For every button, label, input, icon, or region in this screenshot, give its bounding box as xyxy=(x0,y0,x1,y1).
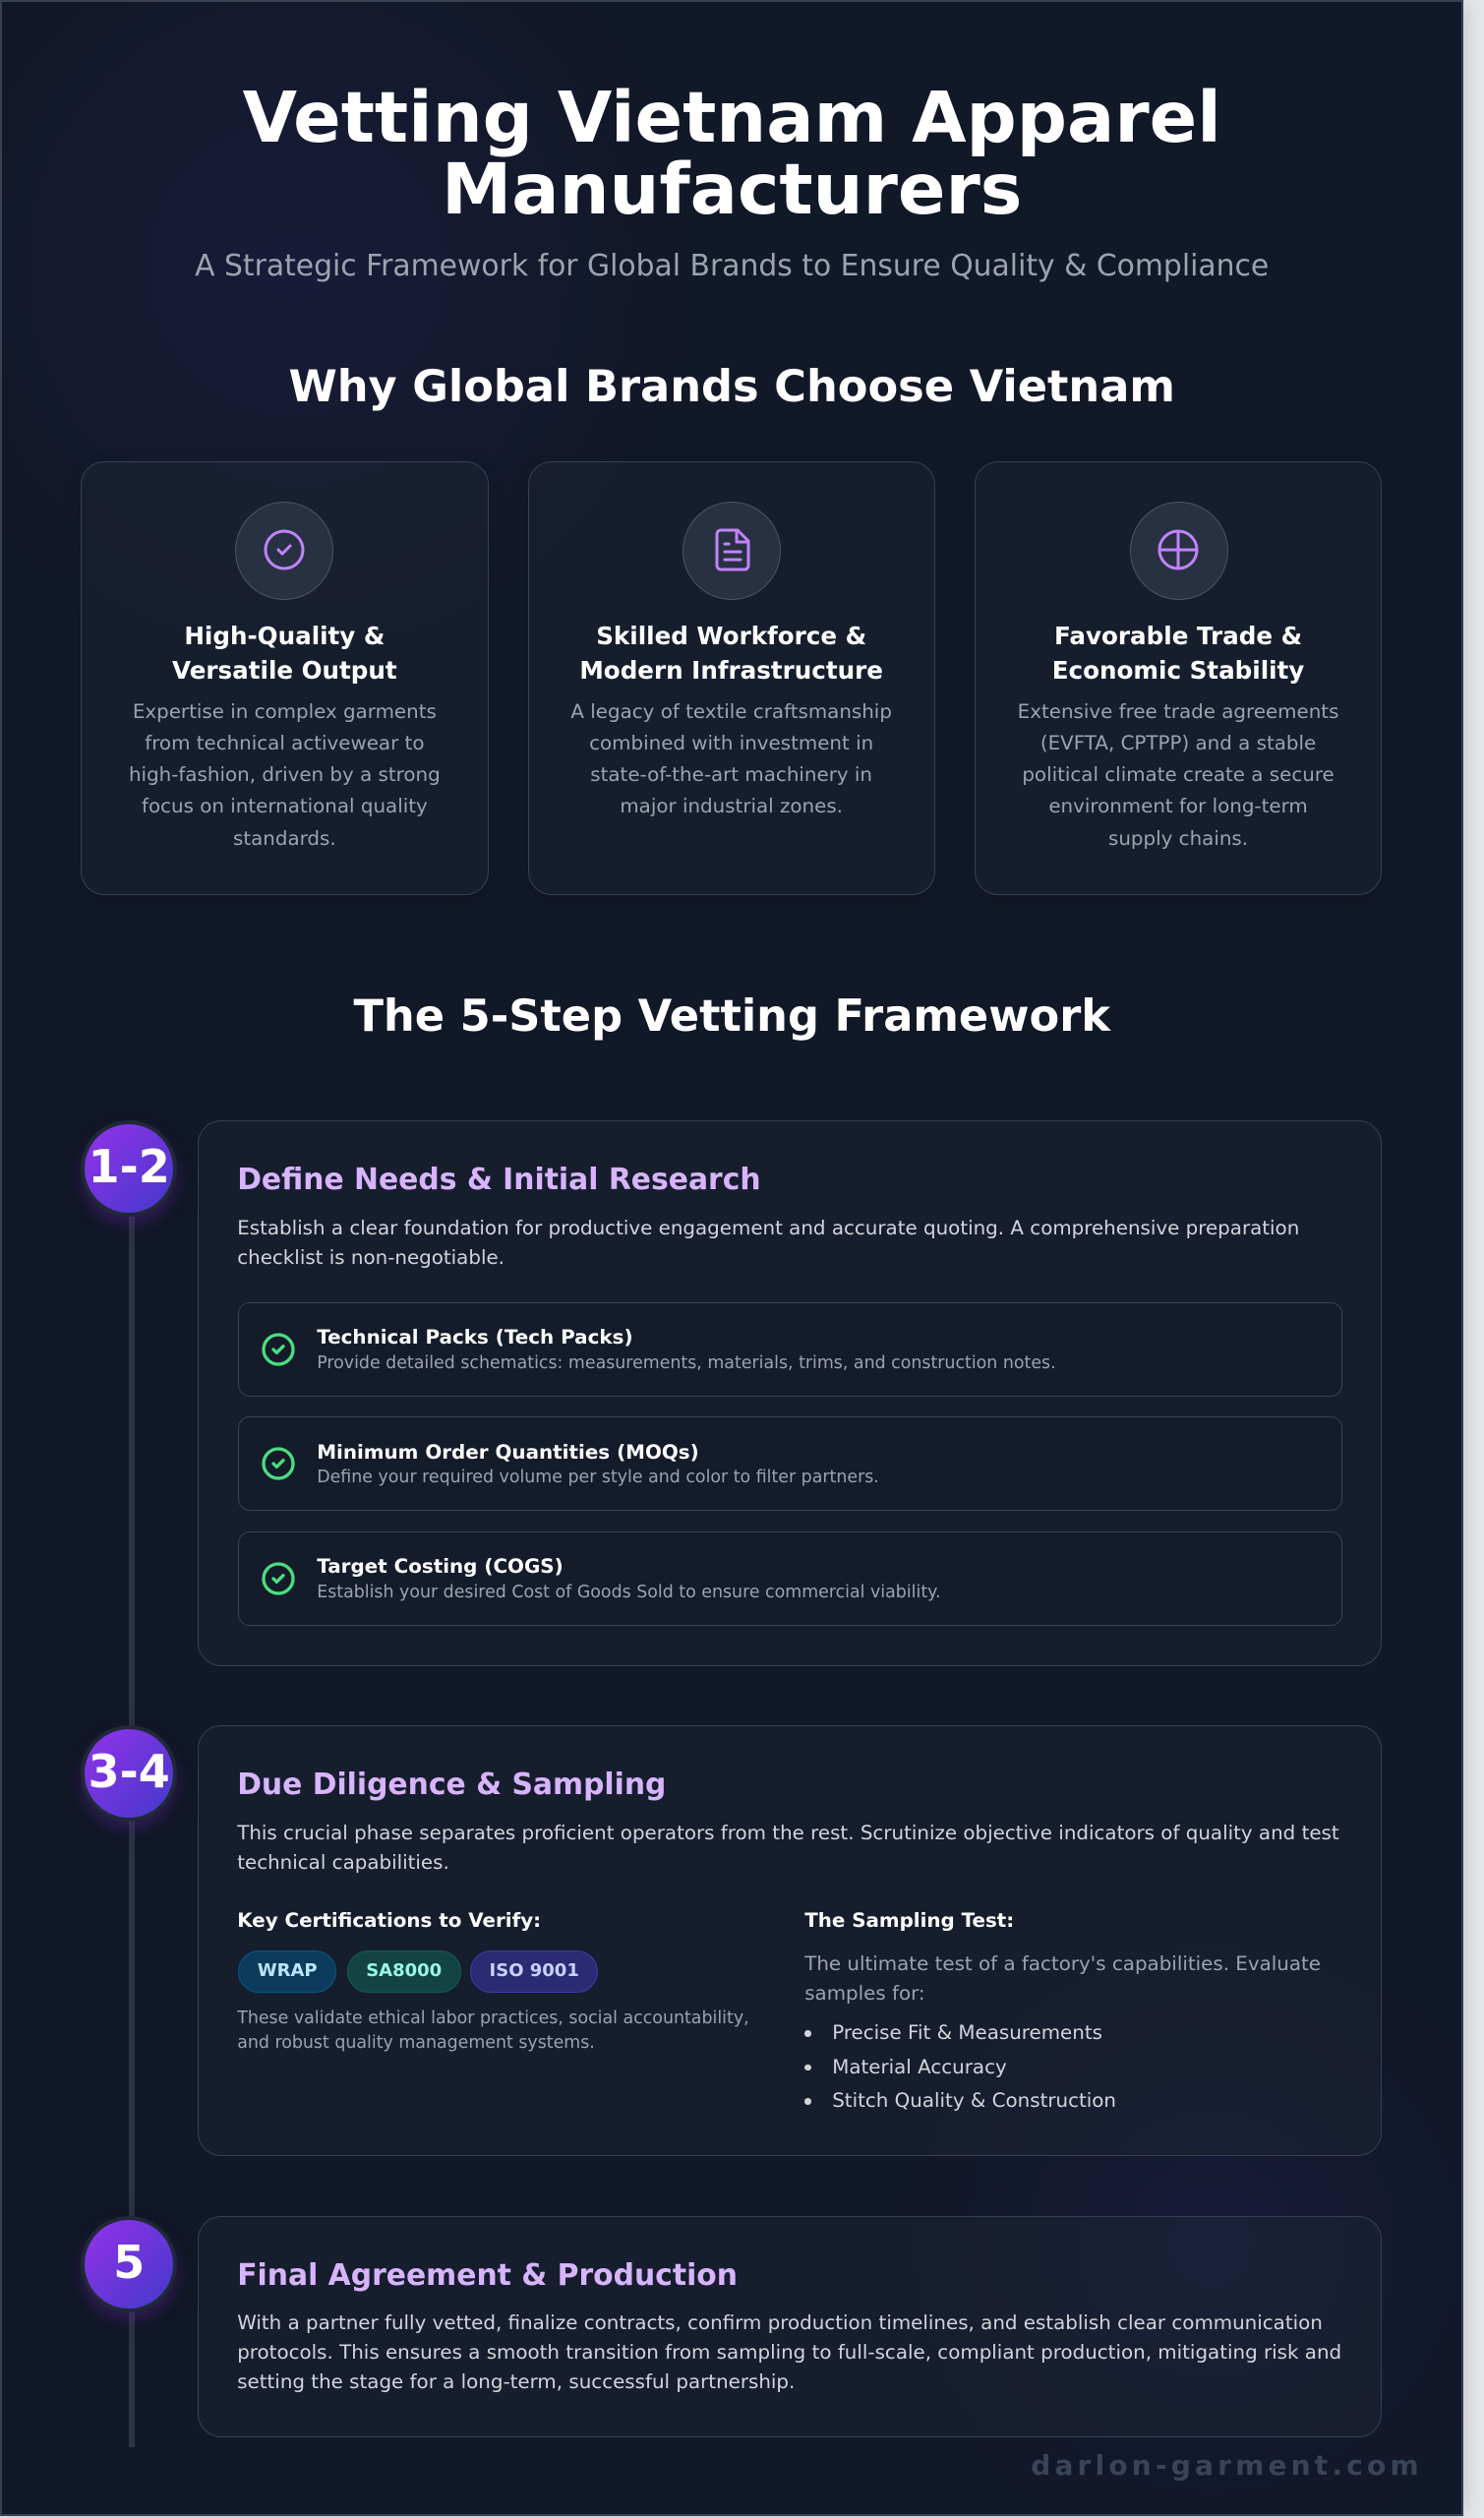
icon: check circle xyxy=(235,502,333,600)
card heading: favorable trade xyxy=(1052,622,1304,685)
checklist title: MOQs: Minimum Order Quantities (MOQs) xyxy=(317,1440,699,1464)
tag: WRAP: WRAP xyxy=(258,1959,318,1981)
tag: ISO 9001: ISO 9001 xyxy=(490,1959,579,1981)
subheading: key certifications: Key Certifications to Verify: xyxy=(237,1908,541,1932)
step text: final agreement: setting the stage for a long-term, successful partnership. xyxy=(237,2370,795,2392)
card text: skilled workforce: state-of-the-art machinery in xyxy=(590,763,872,786)
card text: favorable trade: environment for long-term xyxy=(1048,795,1308,817)
card heading: high-quality: Versatile Output xyxy=(172,655,397,685)
icon: globe xyxy=(1130,502,1228,600)
step badge 3-4: 3-4 xyxy=(89,1745,170,1798)
card text: favorable trade: supply chains. xyxy=(1108,827,1248,850)
card text: high-quality: Expertise in complex garments xyxy=(133,700,437,722)
sampling text: samples for: xyxy=(804,1981,925,2005)
card text: favorable trade: Extensive free trade agreements xyxy=(1018,700,1338,722)
watermark: darlon-garment.com xyxy=(1031,2449,1423,2481)
step text: final agreement xyxy=(237,2311,1341,2392)
checklist title: COGS: Target Costing (COGS) xyxy=(317,1554,564,1578)
title xyxy=(243,77,1221,230)
checklist: COGS xyxy=(238,1530,1342,1625)
sampling list: Stitch Quality & Construction xyxy=(832,2089,1116,2112)
card text: high-quality: focus on international quality xyxy=(142,795,428,817)
card heading: high-quality: High-Quality & xyxy=(184,622,385,649)
card text: favorable trade: political climate create a secure xyxy=(1022,763,1335,786)
card heading: skilled workforce xyxy=(579,622,883,685)
timeline line xyxy=(129,1180,135,2447)
title: Manufacturers xyxy=(442,148,1022,230)
step text: final agreement: protocols. This ensures a smooth transition from sampling to full-scale, compliant production, mitigating risk and xyxy=(237,2341,1341,2363)
step heading: define needs: Define Needs & Initial Research xyxy=(237,1163,761,1196)
card text: favorable trade: (EVFTA, CPTPP) and a stable xyxy=(1040,732,1316,754)
step badge 5: 5 xyxy=(113,2235,145,2288)
certifications note: These validate ethical labor practices, social accountability, xyxy=(237,2008,749,2028)
panel: step 3-4 xyxy=(198,1725,1382,2156)
step text: final agreement: With a partner fully vetted, finalize contracts, confirm production timelines, and establish clear communication xyxy=(237,2311,1323,2333)
card text: skilled workforce: major industrial zones. xyxy=(620,795,843,817)
tag: SA8000: SA8000 xyxy=(366,1959,442,1981)
panel: high-quality output xyxy=(81,460,488,895)
step badge 5 xyxy=(81,2215,177,2311)
step badge 1-2 xyxy=(81,1119,177,1216)
panel: step 5 xyxy=(198,2215,1382,2437)
step text: define needs xyxy=(237,1216,1299,1269)
checklist text: tech packs: Provide detailed schematics: measurements, materials, trims, and construction notes. xyxy=(317,1353,1056,1373)
card text: favorable trade xyxy=(1018,700,1338,850)
tag: ISO 9001 xyxy=(470,1949,598,1993)
card text: high-quality: standards. xyxy=(233,827,336,850)
panel: skilled workforce xyxy=(527,460,935,895)
card text: skilled workforce xyxy=(570,700,892,817)
step text: define needs: Establish a clear foundation for productive engagement and accurate quoting. A comprehensive preparation xyxy=(237,1216,1299,1239)
certifications note xyxy=(237,2008,749,2052)
card heading: favorable trade: Economic Stability xyxy=(1052,655,1304,685)
step text: due diligence xyxy=(237,1822,1339,1874)
card text: high-quality: high-fashion, driven by a strong xyxy=(129,763,441,786)
checklist text: COGS: Establish your desired Cost of Goods Sold to ensure commercial viability. xyxy=(317,1582,940,1601)
card text: skilled workforce: combined with investment in xyxy=(589,732,873,754)
sampling list xyxy=(804,2021,1116,2112)
heading: the 5-step vetting framework: The 5-Step Vetting Framework xyxy=(353,989,1110,1041)
subheading: sampling test: The Sampling Test: xyxy=(804,1908,1014,1932)
checklist text: MOQs: Define your required volume per style and color to filter partners. xyxy=(317,1468,879,1487)
sampling text xyxy=(804,1951,1321,2005)
checklist title: tech packs: Technical Packs (Tech Packs) xyxy=(317,1326,633,1348)
step heading: due diligence: Due Diligence & Sampling xyxy=(237,1767,666,1802)
step heading: final agreement: Final Agreement & Production xyxy=(237,2258,738,2292)
heading: why global brands choose vietnam: Why Global Brands Choose Vietnam xyxy=(288,360,1175,411)
step text: due diligence: technical capabilities. xyxy=(237,1851,449,1874)
sampling list: Precise Fit & Measurements xyxy=(832,2021,1102,2044)
tag: SA8000 xyxy=(347,1949,461,1993)
checklist: MOQs xyxy=(238,1416,1342,1511)
card text: high-quality xyxy=(129,700,441,850)
panel: step 1-2 xyxy=(198,1119,1382,1666)
card heading: skilled workforce: Modern Infrastructure xyxy=(579,655,883,685)
sampling text: The ultimate test of a factory's capabilities. Evaluate xyxy=(804,1951,1321,1975)
title: Vetting Vietnam Apparel xyxy=(243,77,1221,157)
tag: WRAP xyxy=(238,1949,336,1993)
sampling list: Material Accuracy xyxy=(832,2056,1007,2078)
card heading: high-quality xyxy=(172,622,397,685)
step badge 1-2: 1-2 xyxy=(89,1139,170,1192)
step badge 3-4 xyxy=(81,1725,177,1822)
panel: favorable trade xyxy=(975,460,1382,895)
card text: high-quality: from technical activewear to xyxy=(145,732,424,754)
step text: due diligence: This crucial phase separates proficient operators from the rest. Scrutinize objective indicators of quality and test xyxy=(237,1822,1339,1844)
checklist: tech packs xyxy=(238,1302,1342,1397)
subtitle: A Strategic Framework for Global Brands to Ensure Quality & Compliance xyxy=(195,248,1269,283)
icon: document xyxy=(683,502,781,600)
card text: skilled workforce: A legacy of textile craftsmanship xyxy=(570,700,892,722)
certifications note: and robust quality management systems. xyxy=(237,2032,595,2052)
card heading: favorable trade: Favorable Trade & xyxy=(1054,622,1302,649)
step text: define needs: checklist is non-negotiable. xyxy=(237,1245,505,1269)
card heading: skilled workforce: Skilled Workforce & xyxy=(596,622,866,649)
